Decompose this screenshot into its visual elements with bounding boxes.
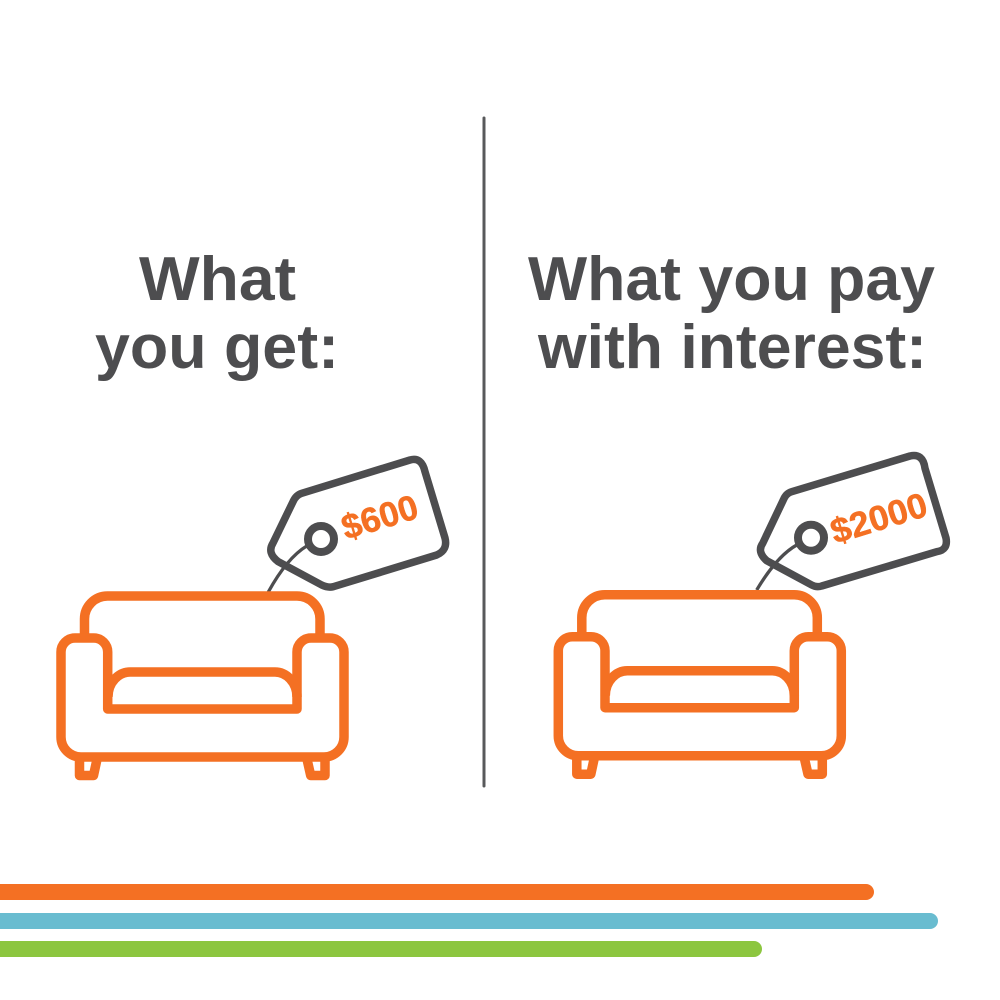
center divider — [482, 118, 486, 786]
heading: what you pay with interest — [528, 245, 936, 382]
icon: orange sofa, right — [558, 595, 841, 774]
heading: what you pay with interest: with interest: — [537, 313, 927, 382]
price tag: $2000 — [757, 456, 946, 590]
price tag: $600: $600 — [337, 488, 423, 548]
price tag: $2000: $2000 — [826, 485, 932, 552]
heading: what you get: What — [139, 245, 296, 314]
price tag: $600 — [268, 459, 446, 592]
decorative colored bars — [0, 884, 938, 957]
heading: what you pay with interest: What you pay — [528, 245, 936, 314]
heading: what you get: you get: — [95, 313, 339, 382]
heading: what you get — [95, 245, 339, 382]
icon: orange sofa, left — [61, 596, 344, 776]
